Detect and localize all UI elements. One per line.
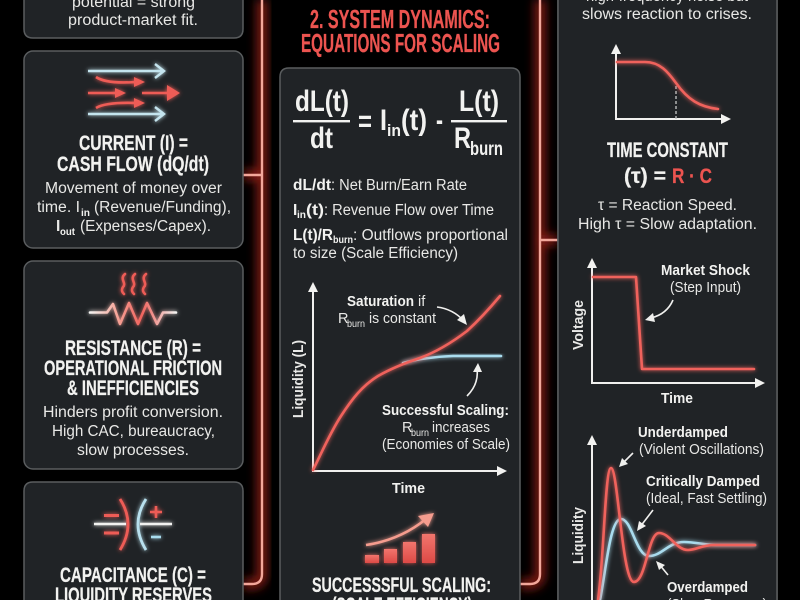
heading: resistance: RESISTANCE (R) = <box>65 336 201 360</box>
annotation: saturation: Saturation <box>347 294 414 310</box>
annotation: successful scaling: (Economies of Scale) <box>382 437 510 453</box>
connector: centre to right column <box>520 0 558 584</box>
panel: time response <box>558 0 777 600</box>
annotation: critically damped: (Ideal, Fast Settling) <box>646 491 767 507</box>
annotation: successful scaling <box>382 363 510 453</box>
heading: system dynamics <box>301 6 500 58</box>
heading: capacitance <box>55 563 212 600</box>
annotation: saturation: is constant <box>369 311 436 327</box>
heading: current: CASH FLOW (dQ/dt) <box>57 152 209 176</box>
heading: current <box>57 131 209 176</box>
text: current description: (Expenses/Capex). <box>80 218 211 235</box>
equation: - <box>436 104 443 137</box>
text: resistance description <box>43 404 223 459</box>
equation: in <box>387 121 401 140</box>
annotation: saturation: burn <box>347 318 365 330</box>
annotation: underdamped: (Violent Oscillations) <box>639 442 764 458</box>
equation: I <box>380 104 387 137</box>
chart: market shock step input: Voltage <box>571 300 587 350</box>
chart: decay curve <box>611 44 731 124</box>
text: current description: (Revenue/Funding), <box>94 199 231 216</box>
chart: market shock step input: Time <box>661 391 693 407</box>
text: current description: time. I <box>37 199 80 216</box>
panel: capacitance <box>24 482 243 600</box>
text: equation definitions: I <box>293 202 297 219</box>
annotation: market shock: Market Shock <box>661 263 751 279</box>
annotation: successful scaling: Successful Scaling: <box>382 403 509 419</box>
icon: heat and resistor <box>90 274 176 324</box>
text: equation definitions: to size (Scale Efficiency) <box>293 245 458 262</box>
equation: (t) <box>401 104 427 137</box>
annotation: saturation: R <box>338 311 348 327</box>
text: current description: out <box>60 226 75 238</box>
heading: successful scaling <box>312 573 491 600</box>
equation: dL(t) <box>295 85 349 118</box>
icon: flow arrows <box>88 64 180 121</box>
text: equation definitions: burn <box>333 234 353 246</box>
text: resistance description: slow processes. <box>77 442 189 459</box>
text: current description: I <box>56 218 60 235</box>
icon: growth bars <box>365 513 435 563</box>
annotation: underdamped: Underdamped <box>638 425 728 441</box>
heading: system dynamics: 2. SYSTEM DYNAMICS: <box>310 6 490 34</box>
panel: equations <box>280 68 520 600</box>
equation: L(t) <box>459 85 499 118</box>
heading: capacitance: CAPACITANCE (C) = <box>60 563 206 587</box>
annotation: market shock: (Step Input) <box>670 280 741 296</box>
text: current description <box>37 180 231 238</box>
panel: voltage (cut off at top): product-market fit. <box>68 12 198 29</box>
equation: R <box>454 122 471 155</box>
heading: current: CURRENT (I) = <box>79 131 188 155</box>
heading: resistance: OPERATIONAL FRICTION <box>44 356 222 380</box>
panel: current <box>24 51 243 248</box>
text: time constant description <box>578 197 757 233</box>
annotation: overdamped: Overdamped <box>667 580 748 596</box>
equation: = <box>358 105 372 138</box>
heading: system dynamics: EQUATIONS FOR SCALING <box>301 30 500 58</box>
heading: resistance: & INEFFICIENCIES <box>67 376 199 400</box>
annotation: market shock <box>645 263 751 322</box>
connector: left column to centre <box>243 0 262 584</box>
annotation: successful scaling: R <box>402 420 412 436</box>
text: equation definitions: : Net Burn/Earn Rate <box>331 177 467 194</box>
text: equation definitions: : Revenue Flow over Time <box>324 202 494 219</box>
panel: resistance <box>24 261 243 469</box>
text: time constant description: τ = Reaction Speed. <box>598 197 737 214</box>
heading: time constant: (τ) = <box>624 164 666 188</box>
text: filter description: slows reaction to crises. <box>582 6 752 23</box>
text: equation definitions <box>293 177 508 262</box>
annotation: saturation <box>338 294 467 330</box>
text: current description: Movement of money over <box>45 180 222 197</box>
annotation: overdamped <box>656 561 767 600</box>
annotation: saturation: if <box>418 294 426 310</box>
text: time constant description: High τ = Slow adaptation. <box>578 216 757 233</box>
chart: damping responses <box>571 425 767 600</box>
heading: time constant: TIME CONSTANT <box>607 138 728 162</box>
text: equation definitions: (t) <box>306 202 324 219</box>
annotation: successful scaling: burn <box>411 427 429 439</box>
heading: time constant <box>607 138 728 188</box>
text: resistance description: High CAC, bureaucracy, <box>52 423 215 440</box>
annotation: underdamped <box>619 425 764 467</box>
text: resistance description: Hinders profit conversion. <box>43 404 223 421</box>
heading: time constant: R · C <box>672 164 712 188</box>
chart: damping responses: Liquidity <box>571 507 587 564</box>
equation: dt <box>310 122 333 155</box>
equation: burn <box>470 139 503 160</box>
text: equation definitions: L(t)/R <box>293 227 333 244</box>
heading: resistance <box>44 336 222 400</box>
text: equation definitions: dL/dt <box>293 177 331 194</box>
chart: market shock step input <box>571 258 765 407</box>
annotation: critically damped: Critically Damped <box>646 474 760 490</box>
chart: liquidity over time <box>291 282 510 497</box>
heading: successful scaling: SUCCESSSFUL SCALING: <box>312 573 491 597</box>
annotation: critically damped <box>637 474 767 531</box>
equation <box>293 85 507 160</box>
chart: liquidity over time: Time <box>392 481 425 497</box>
icon: capacitor <box>94 499 172 550</box>
text: current description: in <box>81 207 90 219</box>
annotation: successful scaling: increases <box>432 420 490 436</box>
text: equation definitions: : Outflows proportional <box>353 227 508 244</box>
text: equation definitions: in <box>297 209 306 221</box>
chart: liquidity over time: Liquidity (L) <box>291 340 307 418</box>
panel: voltage (cut off at top) <box>24 0 243 38</box>
